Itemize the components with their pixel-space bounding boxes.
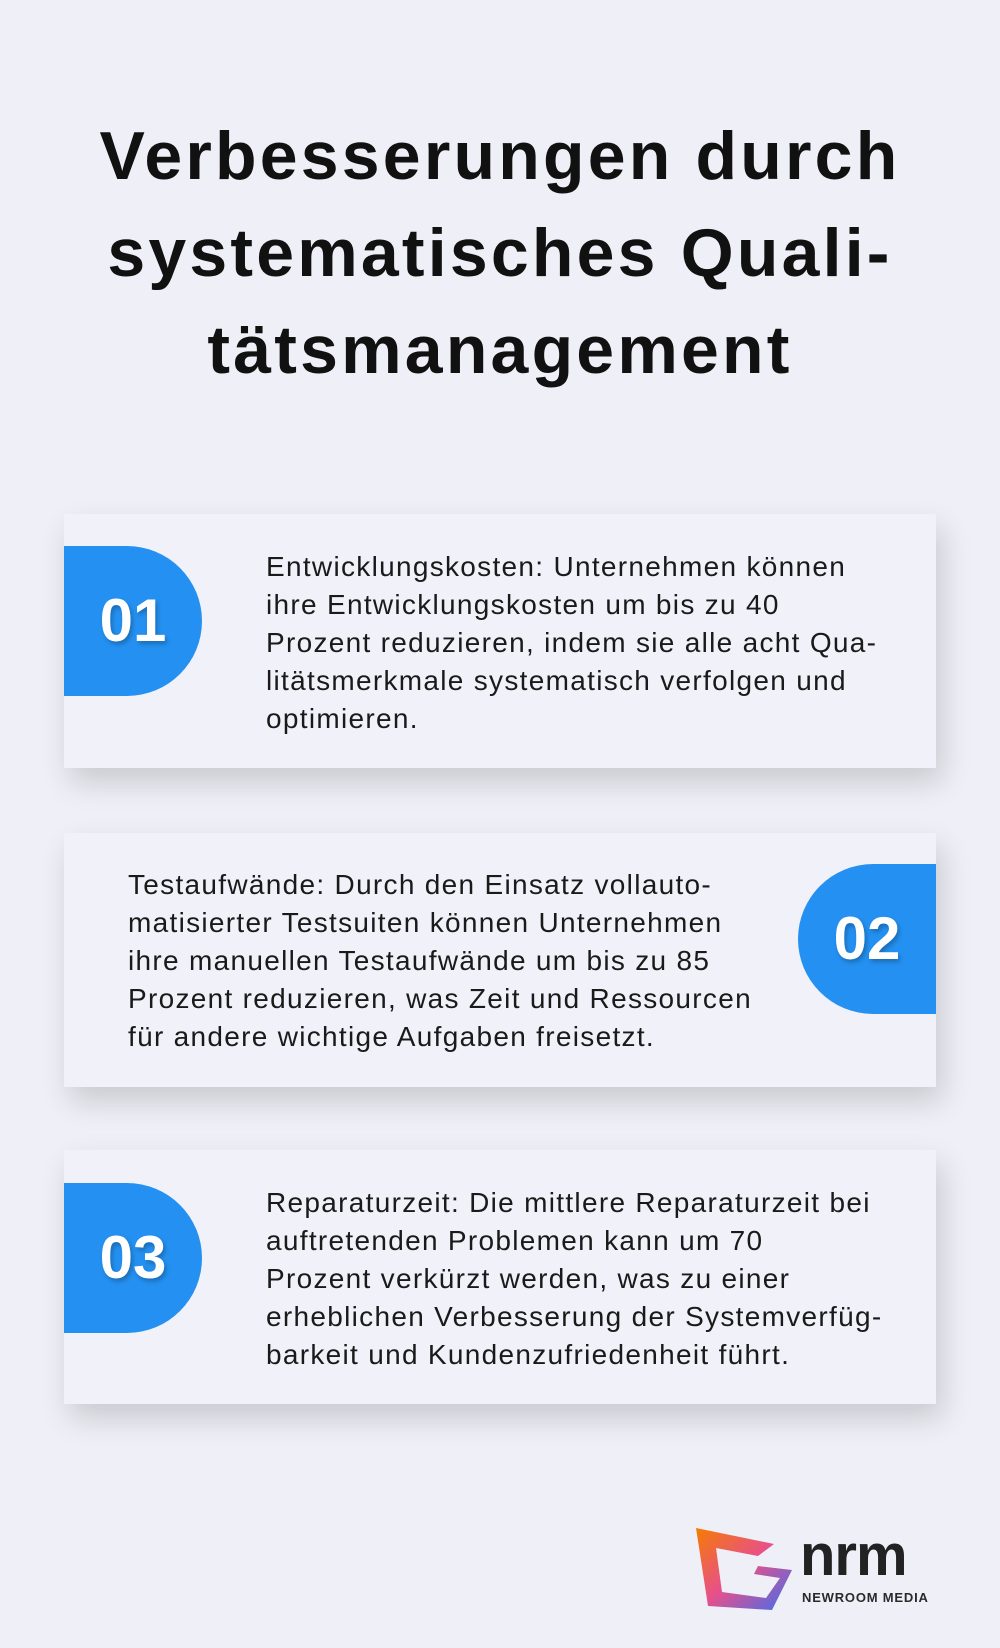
title: systematisches Quali- bbox=[107, 215, 893, 291]
panel: card 1 bbox=[64, 514, 936, 768]
text 3: auftretenden Problemen kann um 70 bbox=[266, 1225, 763, 1256]
text 3: Reparaturzeit: Die mittlere Reparaturzeit bei bbox=[266, 1187, 871, 1218]
text 3: barkeit und Kundenzufriedenheit führt. bbox=[266, 1339, 790, 1370]
text 2: matisierter Testsuiten können Unternehmen bbox=[128, 907, 722, 938]
logo bbox=[696, 1523, 929, 1610]
text 1: Entwicklungskosten: Unternehmen können bbox=[266, 551, 846, 582]
title: Verbesserungen durch bbox=[100, 118, 900, 194]
title: tätsmanagement bbox=[207, 312, 793, 388]
text 3: Prozent verkürzt werden, was zu einer bbox=[266, 1263, 790, 1294]
text 2: ihre manuellen Testaufwände um bis zu 85 bbox=[128, 945, 710, 976]
badge 01 bbox=[64, 546, 202, 696]
badge 02: 02 bbox=[834, 905, 900, 972]
text 1: ihre Entwicklungskosten um bis zu 40 bbox=[266, 589, 780, 620]
text 2 bbox=[128, 869, 752, 1052]
badge 03 bbox=[64, 1183, 202, 1333]
text 3 bbox=[266, 1187, 882, 1370]
text 2: Testaufwände: Durch den Einsatz vollauto- bbox=[128, 869, 712, 900]
text 3: erheblichen Verbesserung der Systemverfüg- bbox=[266, 1301, 882, 1332]
text 2: Prozent reduzieren, was Zeit und Ressourcen bbox=[128, 983, 752, 1014]
badge 01: 01 bbox=[100, 587, 166, 654]
text 1: Prozent reduzieren, indem sie alle acht Qua- bbox=[266, 627, 877, 658]
title bbox=[100, 118, 900, 388]
panel: card 3 bbox=[64, 1150, 936, 1404]
badge 02 bbox=[798, 864, 936, 1014]
text 1: optimieren. bbox=[266, 703, 419, 734]
logo: NEWROOM MEDIA bbox=[802, 1590, 929, 1605]
text 1 bbox=[266, 551, 877, 734]
text 1: litätsmerkmale systematisch verfolgen und bbox=[266, 665, 847, 696]
logo text: nrm bbox=[800, 1523, 907, 1588]
icon: logo mark bbox=[696, 1528, 792, 1610]
text 2: für andere wichtige Aufgaben freisetzt. bbox=[128, 1021, 655, 1052]
badge 03: 03 bbox=[100, 1224, 166, 1291]
panel: card 2 bbox=[64, 833, 936, 1087]
